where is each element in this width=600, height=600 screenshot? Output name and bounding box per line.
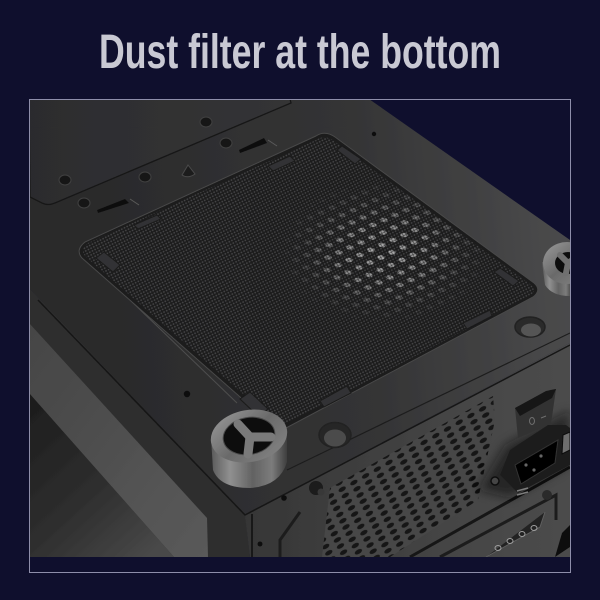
power switch [515, 389, 556, 438]
photo: case underside [29, 99, 591, 557]
lower panel slots [410, 467, 570, 557]
screw recess holes [319, 317, 545, 448]
raised top plate [29, 99, 376, 397]
screws [59, 117, 232, 208]
ventilation holes [322, 396, 495, 557]
small dots [372, 132, 376, 136]
thumb screw [281, 481, 324, 501]
power socket [491, 425, 570, 495]
light through filter [286, 186, 480, 319]
filter recess [79, 133, 538, 429]
plate edge lines [38, 300, 570, 515]
side panel [29, 288, 250, 557]
port connector [495, 526, 537, 550]
bottom plate [29, 99, 570, 515]
socket shadow [478, 410, 570, 498]
back panel [245, 343, 570, 557]
latches [97, 138, 267, 213]
image frame [30, 100, 570, 572]
foot blades [238, 424, 271, 454]
dust filter mesh [83, 137, 534, 424]
corner edge [251, 514, 253, 557]
filter tabs [96, 146, 519, 416]
foot: front [210, 410, 288, 488]
cone screw [182, 165, 195, 177]
foot: rear [542, 242, 570, 296]
